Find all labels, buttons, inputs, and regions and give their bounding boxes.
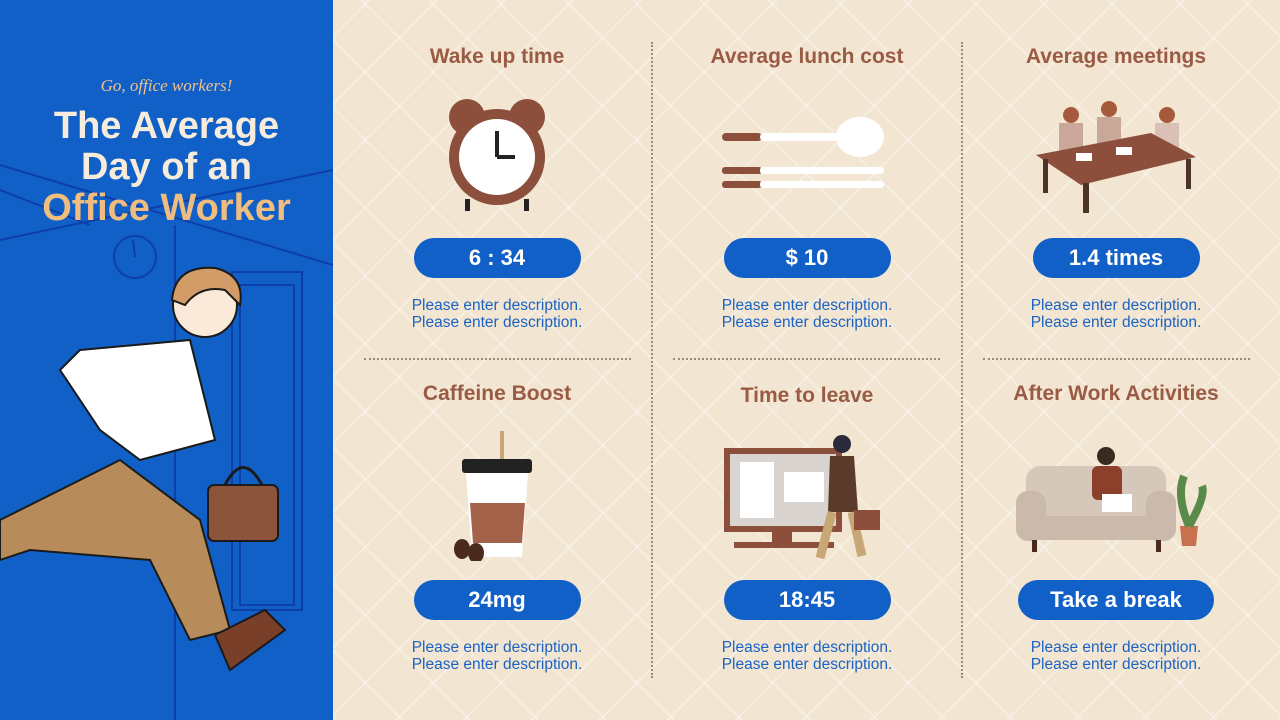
panel: caffeine	[412, 382, 582, 673]
subtitle: Go, office workers!	[101, 76, 232, 95]
title	[42, 105, 291, 229]
icon: cutlery	[722, 117, 884, 188]
heading: Average lunch cost	[711, 45, 903, 68]
icon: computer and worker	[724, 435, 880, 560]
description: Please enter description.	[1031, 639, 1201, 656]
value pill	[1032, 238, 1200, 278]
value pill	[414, 580, 580, 620]
value pill	[724, 580, 890, 620]
description: Please enter description.	[1031, 314, 1201, 331]
illustration: running office worker	[0, 266, 286, 672]
heading: Time to leave	[741, 384, 873, 407]
panel: wake up time	[412, 45, 582, 331]
description	[412, 639, 582, 673]
value pill: 18:45	[779, 587, 835, 612]
description	[1031, 639, 1201, 673]
value pill: 1.4 times	[1069, 245, 1163, 270]
description: Please enter description.	[412, 656, 582, 673]
description	[722, 639, 892, 673]
description: Please enter description.	[1031, 656, 1201, 673]
description: Please enter description.	[1031, 297, 1201, 314]
heading: Caffeine Boost	[423, 382, 571, 405]
description	[722, 297, 892, 331]
value pill: 6 : 34	[469, 245, 525, 270]
icon: alarm clock	[449, 99, 545, 211]
title: Day of an	[81, 146, 252, 188]
heading: After Work Activities	[1013, 382, 1219, 405]
panel: meetings	[1026, 45, 1206, 331]
panel: left title	[0, 0, 333, 720]
description	[1031, 297, 1201, 331]
title: Office Worker	[42, 187, 291, 229]
icon: coffee cup	[454, 431, 532, 561]
description: Please enter description.	[722, 639, 892, 656]
panel: time to leave	[722, 384, 892, 673]
description: Please enter description.	[722, 297, 892, 314]
heading: Wake up time	[430, 45, 564, 68]
description: Please enter description.	[412, 314, 582, 331]
value pill: $ 10	[786, 245, 828, 270]
panel: after work	[1013, 382, 1219, 673]
value pill: 24mg	[468, 587, 526, 612]
description	[412, 297, 582, 331]
description: Please enter description.	[722, 656, 892, 673]
value pill: Take a break	[1050, 587, 1182, 612]
icon: meeting table	[1036, 101, 1196, 213]
value pill	[414, 238, 580, 278]
panel: lunch cost	[711, 45, 904, 331]
title: The Average	[54, 105, 279, 147]
description: Please enter description.	[412, 297, 582, 314]
description: Please enter description.	[412, 639, 582, 656]
value pill	[724, 238, 890, 278]
value pill	[1018, 580, 1214, 620]
icon: sofa	[1016, 447, 1207, 552]
heading: Average meetings	[1026, 45, 1206, 68]
description: Please enter description.	[722, 314, 892, 331]
